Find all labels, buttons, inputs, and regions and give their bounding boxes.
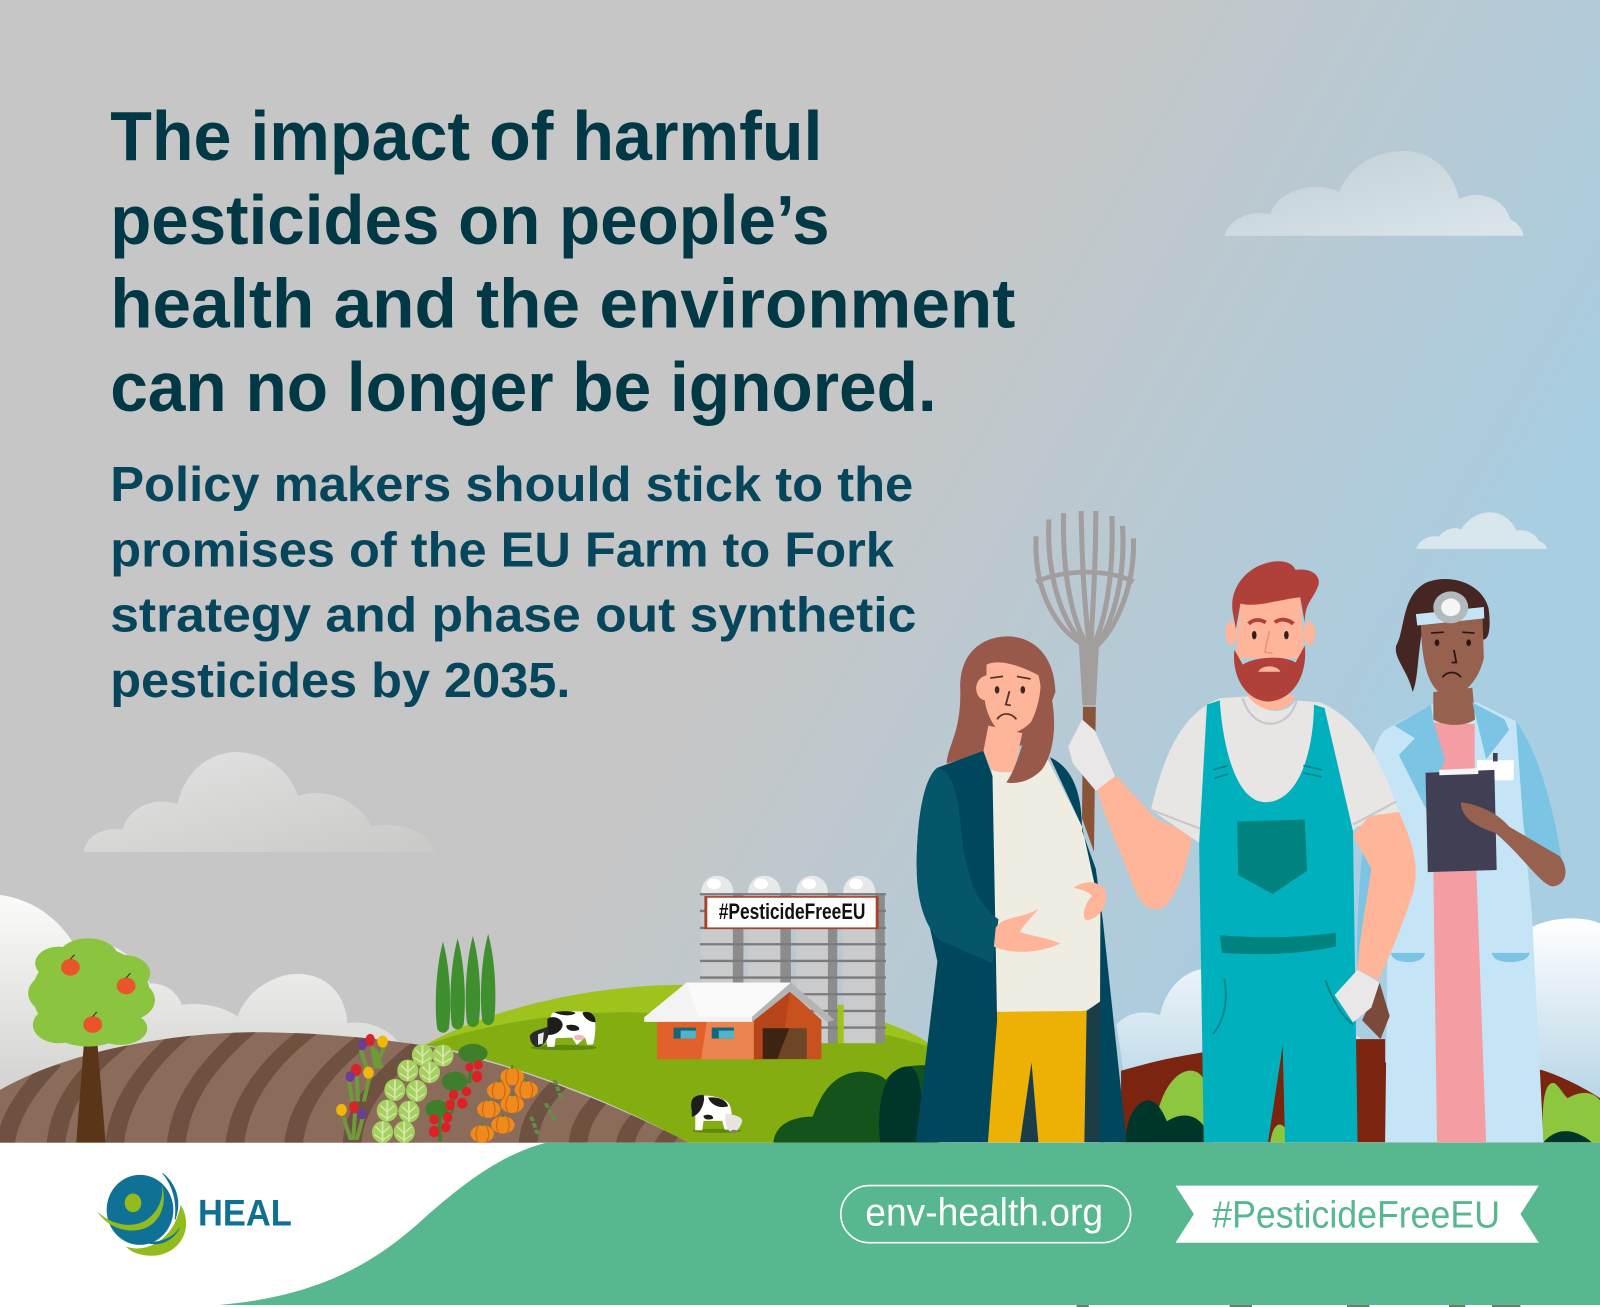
ploughed field xyxy=(0,1032,688,1143)
landscape left: fields, farm and animals xyxy=(0,876,939,1147)
apple tree xyxy=(28,938,155,1143)
dark green bushes bottom xyxy=(879,1067,1592,1142)
subtitle text block: strategy and phase out synthetic xyxy=(110,589,916,643)
green hill lower band xyxy=(425,1012,939,1143)
logo: HEAL xyxy=(97,1173,186,1256)
white clouds behind the field xyxy=(0,895,399,1093)
footer white band xyxy=(0,1143,1600,1307)
cow on lower hill xyxy=(691,1095,742,1133)
title xyxy=(110,97,1015,426)
brown hill right xyxy=(1121,1039,1600,1142)
cloud: small right xyxy=(1416,512,1547,549)
person: doctor xyxy=(1357,579,1565,1142)
silos xyxy=(700,876,886,1043)
cloud: top right xyxy=(1224,151,1523,236)
dark bushes xyxy=(773,1065,939,1143)
pitchfork xyxy=(1036,511,1134,852)
hashtag ribbon xyxy=(1176,1186,1539,1243)
cypress trees xyxy=(436,934,495,1033)
silo lower right stub xyxy=(838,1005,844,1043)
title: pesticides on people’s xyxy=(110,181,830,259)
person: farmer xyxy=(1068,561,1416,1142)
pumpkins xyxy=(471,1065,538,1143)
green hill xyxy=(425,985,939,1143)
title: can no longer be ignored. xyxy=(110,348,937,426)
footer green wave xyxy=(219,1143,1600,1305)
subtitle text block: promises of the EU Farm to Fork xyxy=(110,523,895,577)
hashtag ribbon: #PesticideFreeEU xyxy=(1212,1193,1500,1235)
green bushes right xyxy=(1155,1071,1600,1142)
website pill xyxy=(841,1186,1131,1243)
title: The impact of harmful xyxy=(110,97,822,175)
silo sign xyxy=(706,897,877,928)
green bean row xyxy=(531,1080,562,1136)
cabbage rows xyxy=(372,1044,454,1143)
landscape right and people xyxy=(879,511,1600,1142)
subtitle text block: Policy makers should stick to the xyxy=(110,458,913,512)
flower row xyxy=(336,1034,388,1140)
cloud: left middle xyxy=(84,752,435,852)
barn xyxy=(644,983,834,1059)
person: woman xyxy=(916,636,1127,1142)
title: health and the environment xyxy=(110,265,1015,343)
subtitle text block: pesticides by 2035. xyxy=(110,654,570,708)
white cloud right xyxy=(1116,918,1600,1104)
cow on upper hill xyxy=(530,1011,597,1050)
silo sign: #PesticideFreeEU xyxy=(719,899,865,924)
subtitle text block xyxy=(110,458,916,708)
website pill: env-health.org xyxy=(865,1191,1103,1234)
tomato plants xyxy=(425,1044,488,1142)
bottom edge marks xyxy=(1077,1305,1520,1307)
logo wordmark: HEAL xyxy=(198,1192,292,1233)
